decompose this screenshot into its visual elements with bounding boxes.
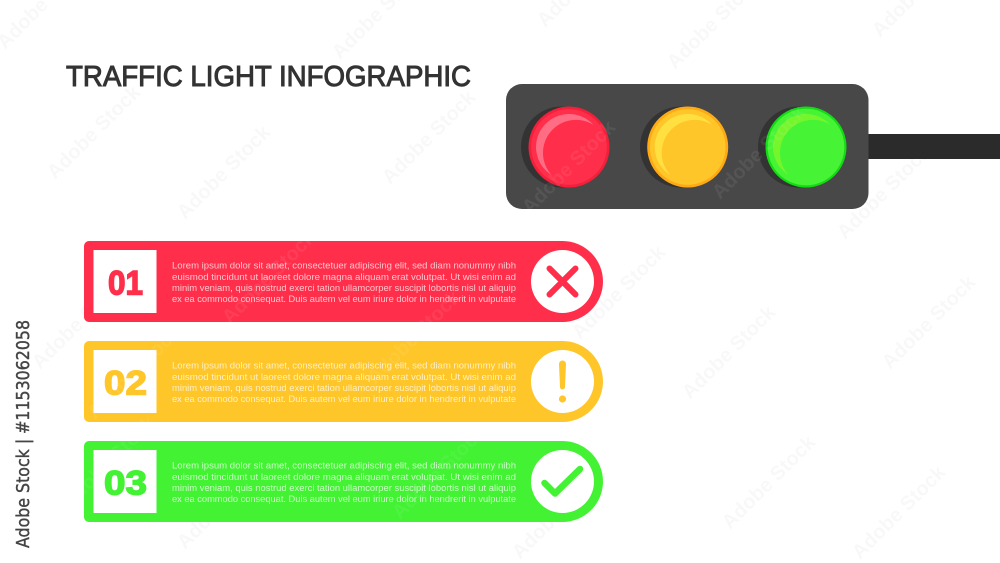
- text: Adobe Stock: [173, 121, 276, 224]
- traffic light housing: [506, 84, 868, 209]
- text: Adobe Stock: [568, 241, 671, 344]
- text block 01: euismod tincidunt ut laoreet dolore magna aliquam erat volutpat. Ut wisi enim ad: [172, 272, 516, 283]
- text: Adobe Stock: [218, 226, 321, 329]
- text: Adobe Stock: [83, 321, 186, 424]
- text: Adobe Stock: [833, 141, 936, 244]
- text: Adobe Stock: [708, 101, 811, 204]
- number badge 01: [94, 250, 156, 313]
- traffic light: [506, 84, 1000, 209]
- text block 02: euismod tincidunt ut laoreet dolore magna aliquam erat volutpat. Ut wisi enim ad: [172, 372, 516, 383]
- panel: item 03 green: [84, 441, 603, 522]
- text block 03: minim veniam, quis nostrud exerci tation ullamcorper suscipit lobortis nisl ut aliquip: [172, 483, 516, 494]
- text: Adobe Stock: [378, 86, 481, 189]
- text: Adobe Stock: [363, 286, 466, 389]
- icon: cross: [531, 250, 594, 313]
- side credit: Adobe Stock | #1153062058: [14, 320, 34, 548]
- text block 02: minim veniam, quis nostrud exerci tation ullamcorper suscipit lobortis nisl ut aliquip: [172, 383, 516, 394]
- text: Adobe Stock: [878, 271, 981, 374]
- text: Adobe Stock: [43, 81, 146, 184]
- text: Adobe Stock: [518, 116, 621, 219]
- text: Adobe Stock: [173, 451, 276, 554]
- text block 01: Lorem ipsum dolor sit amet, consectetuer adipiscing elit, sed diam nonummy nibh: [172, 260, 516, 272]
- panel: item 02 yellow: [84, 341, 603, 422]
- icon: check mark: [531, 450, 594, 513]
- number badge 02: 02: [104, 364, 147, 402]
- text block 03: Lorem ipsum dolor sit amet, consectetuer adipiscing elit, sed diam nonummy nibh: [172, 460, 516, 472]
- text: Adobe Stock: [718, 431, 821, 534]
- icon: exclamation mark: [531, 350, 594, 413]
- text block 02: [172, 360, 516, 405]
- number badge 03: [94, 450, 156, 513]
- red light: [521, 106, 610, 188]
- text: Adobe Stock: [388, 421, 491, 524]
- text block 03: euismod tincidunt ut laoreet dolore magna aliquam erat volutpat. Ut wisi enim ad: [172, 472, 516, 483]
- text: Adobe Stock: [848, 461, 951, 563]
- number badge 01: 01: [108, 264, 143, 302]
- text block 02: Lorem ipsum dolor sit amet, consectetuer adipiscing elit, sed diam nonummy nibh: [172, 360, 516, 372]
- text block 03: [172, 460, 516, 505]
- text: Adobe Stock: [678, 301, 781, 404]
- number badge 02: [94, 350, 156, 413]
- text block 01: minim veniam, quis nostrud exerci tation ullamcorper suscipit lobortis nisl ut aliquip: [172, 283, 516, 294]
- text block 01: ex ea commodo consequat. Duis autem vel eum iriure dolor in hendrerit in vulputate: [172, 294, 516, 305]
- text: Adobe Stock: [58, 411, 161, 514]
- text block 03: ex ea commodo consequat. Duis autem vel eum iriure dolor in hendrerit in vulputate: [172, 494, 516, 505]
- green light: [758, 106, 846, 188]
- number badge 03: 03: [104, 464, 147, 502]
- yellow light: [640, 106, 728, 188]
- text block 02: ex ea commodo consequat. Duis autem vel eum iriure dolor in hendrerit in vulputate: [172, 394, 516, 405]
- text: Adobe Stock: [28, 271, 131, 374]
- text: Adobe Stock: [508, 461, 611, 563]
- title: TRAFFIC LIGHT INFOGRAPHIC: [66, 61, 471, 93]
- panel: item 01 red: [84, 241, 603, 322]
- traffic light arm: [866, 134, 1000, 159]
- text block 01: [172, 260, 516, 305]
